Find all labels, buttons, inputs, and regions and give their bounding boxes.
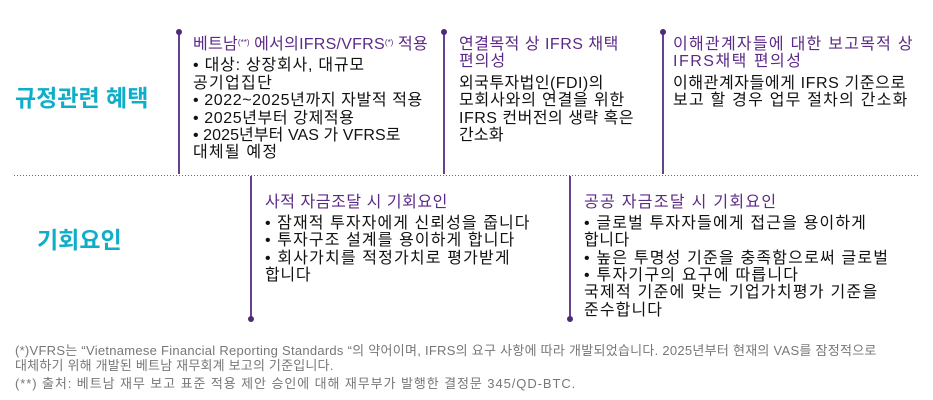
heading: regulatory benefits: 규정관련 혜택 bbox=[15, 85, 148, 111]
text block: consolidation convenience: 간소화 bbox=[459, 127, 504, 144]
text block: private funding bbox=[265, 194, 531, 284]
footnotes: (*)VFRS는 “Vietnamese Financial Reporting Standards “의 약어이며, IFRS의 요구 사항에 따라 개발되었습니다. 2025년부터 현재의 VAS를 잠정적으로 bbox=[15, 342, 877, 358]
marker line 1 bbox=[178, 32, 180, 174]
text block: stakeholder reporting convenience: 보고 할 경우 업무 절차의 간소화 bbox=[673, 92, 909, 109]
text block: consolidation convenience: 편의성 bbox=[459, 53, 506, 70]
text block: private funding: 합니다 bbox=[265, 267, 311, 284]
dotted divider bbox=[14, 175, 919, 176]
text block: public funding: • 투자기구의 요구에 따릅니다 bbox=[584, 267, 799, 284]
text block: public funding: 준수합니다 bbox=[584, 302, 663, 319]
text block: public funding: • 글로벌 투자자들에게 접근을 용이하게 bbox=[584, 215, 867, 232]
text block: private funding: • 회사가치를 적정가치로 평가받게 bbox=[265, 250, 511, 267]
text block: consolidation convenience bbox=[459, 36, 634, 144]
text block: private funding: 사적 자금조달 시 기회요인 bbox=[265, 194, 448, 210]
text block: public funding: 합니다 bbox=[584, 232, 630, 249]
text block: private funding: • 잠재적 투자자에게 신뢰성을 줍니다 bbox=[265, 215, 531, 232]
text block: IFRS/VFRS in Vietnam: 공기업집단 bbox=[193, 75, 273, 92]
text block: private funding: • 투자구조 설계를 용이하게 합니다 bbox=[265, 232, 515, 249]
text block: public funding bbox=[584, 194, 889, 319]
text block: public funding: 국제적 기준에 맞는 기업가치평가 기준을 bbox=[584, 284, 878, 301]
footnotes bbox=[15, 342, 877, 390]
text block: IFRS/VFRS in Vietnam: 대체될 예정 bbox=[193, 144, 278, 161]
footnotes: (**) 출처: 베트남 재무 보고 표준 적용 제안 승인에 대해 재무부가 발행한 결정문 345/QD-BTC. bbox=[15, 376, 576, 390]
text block: IFRS/VFRS in Vietnam: • 2022~2025년까지 자발적 적용 bbox=[193, 92, 423, 109]
marker line 2 bbox=[443, 32, 445, 174]
text block: stakeholder reporting convenience: IFRS채택 편의성 bbox=[673, 53, 802, 70]
marker line 3 bbox=[662, 32, 664, 174]
footnotes: 대체하기 위해 개발된 베트남 재무회계 보고의 기준입니다. bbox=[15, 358, 334, 373]
text block: IFRS/VFRS in Vietnam bbox=[193, 36, 428, 161]
text block: IFRS/VFRS in Vietnam: • 2025년부터 VAS 가 VFRS로 bbox=[193, 127, 401, 144]
text block: IFRS/VFRS in Vietnam: • 2025년부터 강제적용 bbox=[193, 110, 355, 127]
text block: stakeholder reporting convenience: 이해관계자들에게 IFRS 기준으로 bbox=[673, 75, 906, 92]
marker line 4 bbox=[250, 176, 252, 319]
text block: public funding: • 높은 투명성 기준을 충족함으로써 글로벌 bbox=[584, 250, 889, 267]
heading: opportunities: 기회요인 bbox=[37, 227, 122, 253]
text block: consolidation convenience: 모회사와의 연결을 위한 bbox=[459, 92, 625, 109]
text block: IFRS/VFRS in Vietnam: 베트남(**) 에서의IFRS/VFRS(*) 적용 bbox=[193, 36, 428, 53]
text block: public funding: 공공 자금조달 시 기회요인 bbox=[584, 194, 777, 210]
text block: consolidation convenience: 외국투자법인(FDI)의 bbox=[459, 75, 604, 92]
text block: stakeholder reporting convenience: 이해관계자들에 대한 보고목적 상 bbox=[673, 36, 914, 53]
text block: IFRS/VFRS in Vietnam: • 대상: 상장회사, 대규모 bbox=[193, 57, 365, 74]
marker line 5 bbox=[569, 176, 571, 319]
text block: consolidation convenience: 연결목적 상 IFRS 채택 bbox=[459, 36, 619, 53]
text block: consolidation convenience: IFRS 컨버전의 생략 혹은 bbox=[459, 110, 634, 127]
text block: stakeholder reporting convenience bbox=[673, 36, 914, 109]
